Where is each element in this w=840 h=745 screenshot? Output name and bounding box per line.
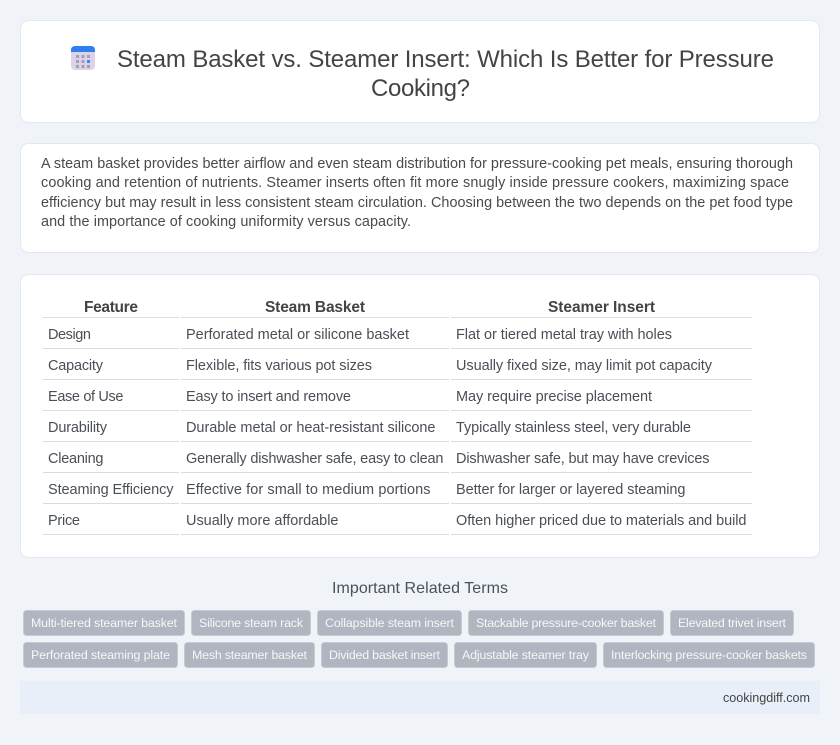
table row: price: Often higher priced due to materials and build	[456, 513, 746, 529]
table row: ease of use	[48, 389, 652, 405]
table header: Steam Basket	[265, 299, 365, 316]
panel: comparison table	[20, 274, 820, 558]
chip	[322, 642, 448, 668]
chip	[318, 610, 462, 636]
text block: summary: cooking and retention of nutrients. Steamer inserts often fit more snugly inside pressure cookers, maximizing space	[41, 175, 789, 191]
table row: design	[48, 327, 672, 343]
table row: price: Price	[48, 513, 80, 529]
chip: Collapsible steam insert	[325, 616, 455, 630]
text block: summary	[41, 156, 793, 230]
icon: calendar	[71, 46, 95, 70]
chip	[670, 610, 794, 636]
table row: price: Usually more affordable	[186, 513, 338, 529]
chip	[454, 642, 596, 668]
heading: important related terms: Important Related Terms	[332, 580, 508, 597]
table row: cleaning: Cleaning	[48, 451, 104, 467]
chip: Mesh steamer basket	[192, 648, 308, 662]
table row: durability: Durable metal or heat-resistant silicone	[186, 420, 436, 436]
table row: steaming efficiency: Better for larger or layered steaming	[456, 482, 686, 498]
table row: cleaning: Dishwasher safe, but may have crevices	[456, 451, 710, 467]
table row: ease of use: May require precise placement	[456, 389, 652, 405]
table row: design: Design	[48, 327, 91, 343]
panel: summary paragraph	[20, 144, 820, 252]
chip	[24, 642, 178, 668]
chip: Stackable pressure-cooker basket	[476, 616, 657, 630]
table rules	[43, 317, 752, 535]
chip: Perforated steaming plate	[31, 648, 170, 662]
chip	[192, 610, 310, 636]
title	[117, 46, 774, 102]
panel: title header	[20, 20, 820, 122]
table row: durability: Typically stainless steel, very durable	[456, 420, 691, 436]
chip: Divided basket insert	[329, 648, 441, 662]
title: Steam Basket vs. Steamer Insert: Which Is Better for Pressure	[117, 46, 774, 73]
table row: steaming efficiency: Steaming Efficiency	[48, 482, 174, 498]
table row: cleaning: Generally dishwasher safe, easy to clean	[186, 451, 444, 467]
table row: design: Flat or tiered metal tray with holes	[456, 327, 672, 343]
table row: cleaning	[48, 451, 710, 467]
chip	[468, 610, 664, 636]
text block: summary: efficiency but may result in less consistent steam circulation. Choosing between the two depends on the pet food type	[41, 195, 793, 211]
table row: durability	[48, 420, 691, 436]
footer: cookingdiff.com	[723, 691, 810, 705]
table row: ease of use: Ease of Use	[48, 389, 124, 405]
text block: summary: A steam basket provides better airflow and even steam distribution for pressure-cooking pet meals, ensuring thorough	[41, 156, 793, 172]
related term chips	[24, 610, 814, 668]
table row: capacity: Capacity	[48, 358, 104, 374]
table row: capacity: Usually fixed size, may limit pot capacity	[456, 358, 713, 374]
table header: Steamer Insert	[548, 299, 655, 316]
footer	[20, 681, 820, 714]
table row: design: Perforated metal or silicone basket	[186, 327, 409, 343]
text block: summary: and the importance of cooking uniformity versus capacity.	[41, 214, 411, 230]
table row: steaming efficiency	[48, 482, 686, 498]
chip: Multi-tiered steamer basket	[31, 616, 178, 630]
table header	[84, 299, 655, 316]
chip	[604, 642, 814, 668]
chip: Interlocking pressure-cooker baskets	[611, 648, 807, 662]
title: Cooking?	[371, 75, 470, 102]
chip: Elevated trivet insert	[678, 616, 787, 630]
chip: Adjustable steamer tray	[462, 648, 590, 662]
table row: price	[48, 513, 746, 529]
table row: steaming efficiency: Effective for small to medium portions	[186, 482, 430, 498]
table header: Feature	[84, 299, 138, 316]
table row: capacity	[48, 358, 713, 374]
table row: durability: Durability	[48, 420, 108, 436]
chip: Silicone steam rack	[199, 616, 304, 630]
chip	[184, 642, 314, 668]
table row: ease of use: Easy to insert and remove	[186, 389, 351, 405]
table row: capacity: Flexible, fits various pot sizes	[186, 358, 372, 374]
chip	[24, 610, 184, 636]
